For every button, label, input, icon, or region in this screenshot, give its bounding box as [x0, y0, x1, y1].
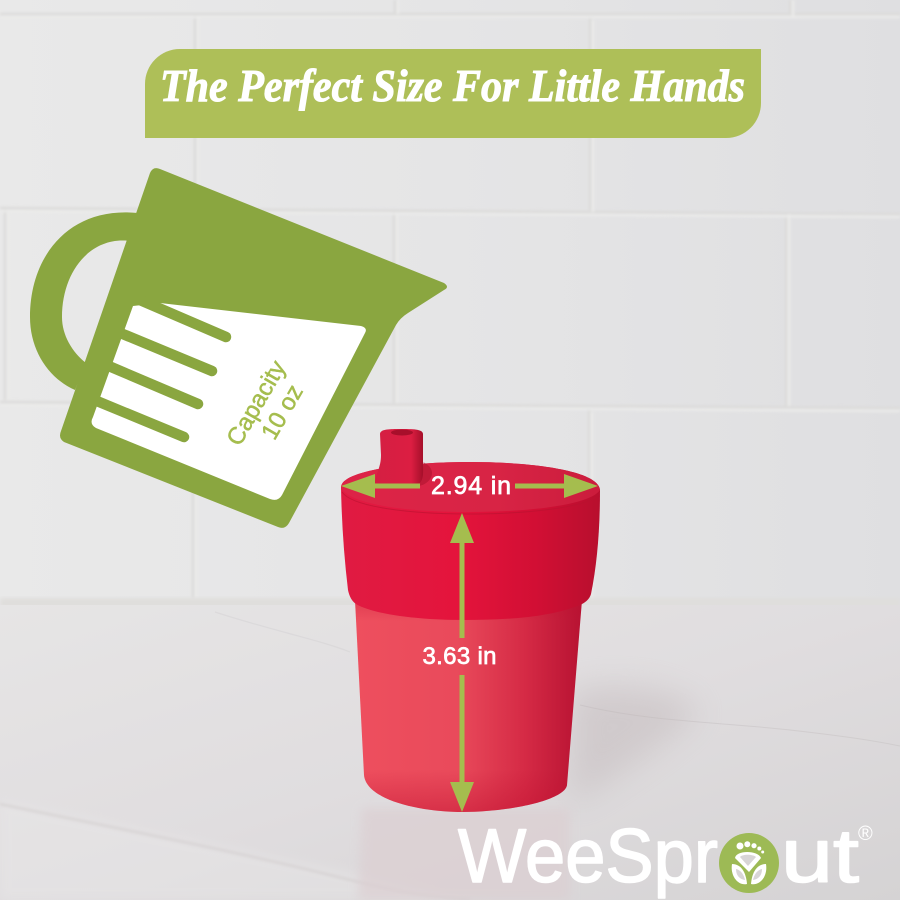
arrow: height down — [450, 675, 474, 812]
lid top — [341, 462, 600, 512]
logo: WeeSprout — [458, 814, 873, 899]
capacity label: Capacity — [221, 356, 292, 450]
spout — [375, 429, 423, 486]
tiled wall background — [0, 0, 900, 605]
logo wordmark left: WeeSpr — [458, 814, 718, 899]
arrow: width right — [515, 474, 598, 498]
registered mark: ® — [858, 823, 873, 845]
logo sprout emblem — [719, 833, 779, 893]
jug handle — [30, 212, 138, 390]
jug window — [92, 303, 366, 500]
jug measure ticks — [92, 300, 226, 437]
arrow: height up — [450, 513, 474, 638]
spout opening — [391, 430, 413, 436]
headline banner — [145, 49, 761, 138]
logo wordmark right: ut — [781, 814, 859, 899]
spout shadow — [418, 462, 432, 486]
cup lid — [341, 462, 600, 620]
cup shadow on counter — [570, 686, 700, 805]
product: red sippy cup — [341, 429, 600, 812]
icon: measuring jug — [30, 168, 447, 528]
cup base — [355, 600, 582, 812]
width label: 2.94 in — [431, 472, 511, 500]
marble counter — [0, 598, 900, 900]
capacity label: 10 oz — [256, 380, 309, 444]
height label: 3.63 in — [422, 643, 496, 670]
headline text: The Perfect Size For Little Hands — [160, 61, 745, 111]
arrow: width left — [341, 474, 420, 498]
cup reflection — [358, 808, 570, 900]
jug body — [60, 168, 447, 528]
